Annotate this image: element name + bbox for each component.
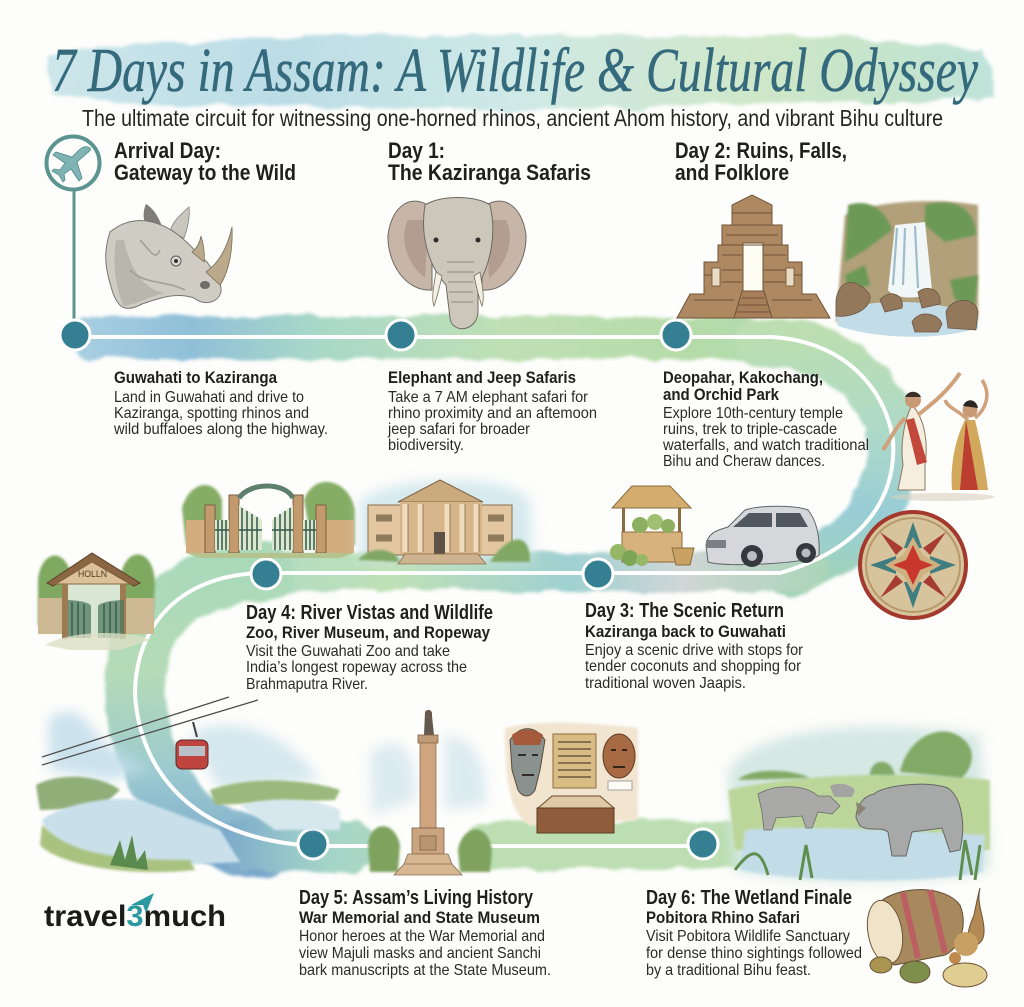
text: day 5 details: view Majuli masks and ancient Sanchi (299, 945, 541, 962)
text: arrival day details: Land in Guwahati and drive to (114, 389, 304, 406)
text: day 4 details: Visit the Guwahati Zoo and take (246, 643, 450, 660)
title banner wash (46, 34, 996, 110)
route node markers (60, 320, 718, 859)
text: day 3 details: Enjoy a scenic drive with stops for (585, 642, 804, 659)
text: day 3 details (585, 600, 804, 692)
text: day 2 details: and Orchid Park (663, 385, 779, 404)
illustration: park entrance gate (38, 553, 155, 650)
text: day 6 details: for dense thino sightings followed (646, 945, 862, 962)
text: day 2 details: Explore 10th-century temple (663, 405, 843, 422)
text: day 3 details: traditional woven Jaapis. (585, 675, 746, 692)
icon: plane in circle (46, 136, 100, 190)
illustration: temple ruins (677, 195, 830, 318)
text: day 4 details: India’s longest ropeway across the (246, 659, 467, 676)
text: day 1 details: jeep safari for broader (387, 421, 531, 438)
text: day 1 heading: The Kaziranga Safaris (388, 160, 591, 185)
text: arrival day heading: Gateway to the Wild (114, 160, 296, 185)
illustration: ropeway cables and cabin (42, 697, 258, 769)
illustration: jaapi hat (860, 512, 966, 618)
watercolor river path (90, 338, 892, 848)
text: day 1 heading (388, 138, 591, 185)
text: day 2 heading (675, 138, 847, 185)
text: day 4 details: Day 4: River Vistas and Wildlife (246, 602, 493, 624)
illustration: elephant head (388, 198, 526, 329)
text: day 5 details: Day 5: Assam’s Living History (299, 887, 534, 909)
text: arrival day details: Guwahati to Kaziranga (114, 368, 277, 387)
text: day 1 details: rhino proximity and an aftemoon (388, 405, 597, 422)
text: arrival day details (113, 368, 328, 438)
text: day 3 details: tender coconuts and shopping for (585, 658, 802, 675)
route white line (90, 337, 893, 846)
text: day 4 details: Zoo, River Museum, and Ropeway (246, 623, 490, 642)
text: day 2 heading: and Folklore (675, 160, 789, 185)
illustration: Bihu dancers (883, 373, 995, 501)
text: day 1 details: Take a 7 AM elephant safari for (388, 389, 589, 406)
text: day 5 details: War Memorial and State Museum (299, 908, 540, 927)
text: day 2 heading: Day 2: Ruins, Falls, (675, 138, 847, 163)
logo: travel3much: travel3much (44, 900, 226, 933)
text: day 6 details: Pobitora Rhino Safari (646, 908, 800, 927)
illustration: river scene (36, 712, 340, 872)
text: day 6 details (646, 887, 862, 979)
text: day 2 details: Deopahar, Kakochang, (663, 368, 823, 387)
illustration: wetland with rhinos (728, 727, 990, 881)
text: day 1 details (387, 368, 597, 454)
illustration: zoo gate (182, 482, 355, 558)
text: arrival day details: wild buffaloes along the highway. (113, 421, 328, 438)
illustration: waterfall (836, 201, 978, 337)
illustration: war memorial column (368, 710, 492, 875)
illustration: dhol drum and feast (863, 888, 987, 987)
text: arrival day details: Kaziranga, spotting rhinos and (114, 405, 309, 422)
text: day 2 details: Bihu and Cheraw dances. (663, 453, 825, 470)
text: day 6 details: by a traditional Bihu feast. (646, 962, 811, 979)
text: day 1 details: biodiversity. (388, 437, 464, 454)
text: day 3 details: Day 3: The Scenic Return (585, 600, 784, 622)
text: day 5 details: bark manuscripts at the State Museum. (299, 962, 551, 979)
arrival vertical connector (72, 190, 76, 330)
text: day 2 details: waterfalls, and watch traditional (662, 437, 869, 454)
illustration: silver car (706, 506, 819, 567)
illustration: museum artefacts (505, 723, 638, 833)
text: day 6 details: Visit Pobitora Wildlife Sanctuary (646, 928, 850, 945)
text: day 6 details: Day 6: The Wetland Finale (646, 887, 852, 909)
illustration: rhino head (106, 204, 232, 308)
text: day 5 details (299, 887, 551, 979)
illustration: coconut stall (610, 486, 694, 566)
text: day 1 heading: Day 1: (388, 138, 445, 163)
text: day 2 details (662, 368, 869, 470)
text: day 1 details: Elephant and Jeep Safaris (388, 368, 576, 387)
illustration: park entrance gate: HOLLN (78, 569, 107, 579)
text: day 2 details: ruins, trek to triple-cascade (663, 421, 837, 438)
illustration: museum building (358, 480, 532, 564)
text: day 5 details: Honor heroes at the War Memorial and (299, 928, 545, 945)
text: arrival day heading (114, 138, 296, 185)
text: day 3 details: Kaziranga back to Guwahati (585, 622, 786, 641)
text: arrival day heading: Arrival Day: (114, 138, 221, 163)
text: day 4 details: Brahmaputra River. (246, 676, 368, 693)
text: day 4 details (246, 602, 493, 693)
